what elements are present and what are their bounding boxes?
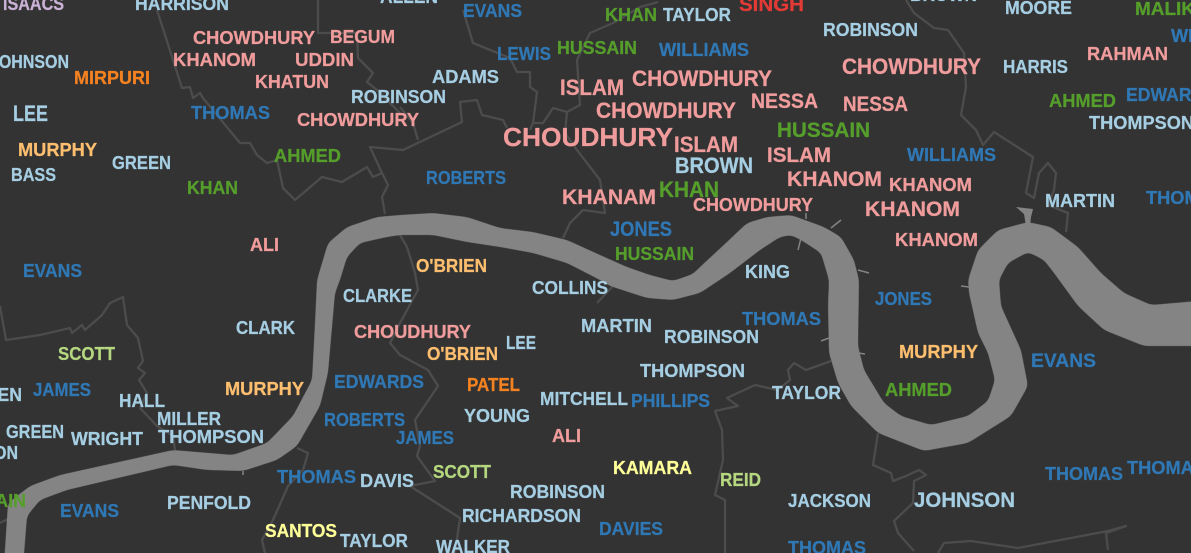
name: TAYLOR: TAYLOR	[663, 5, 731, 25]
name: PHILLIPS: PHILLIPS	[631, 391, 710, 411]
name: JAMES: JAMES	[33, 380, 91, 400]
name: BROWN: BROWN	[675, 153, 753, 178]
name: KHATUN: KHATUN	[255, 72, 329, 92]
name: MITCHELL: MITCHELL	[540, 389, 628, 409]
name: EVANS: EVANS	[463, 1, 522, 21]
name: KHANOM: KHANOM	[787, 168, 882, 191]
name: KHAN: KHAN	[605, 5, 657, 25]
name: EVANS: EVANS	[23, 261, 82, 281]
name: NESSA: NESSA	[751, 90, 818, 113]
name: EDWARDS: EDWARDS	[334, 372, 424, 392]
name: KING: KING	[745, 262, 790, 282]
name: THOMAS: THOMAS	[1045, 464, 1123, 484]
name: SANTOS: SANTOS	[265, 521, 337, 541]
name: THOMPSON: THOMPSON	[1089, 113, 1191, 133]
name: JACKSON: JACKSON	[788, 491, 871, 511]
name: THOMAS: THOMAS	[191, 103, 270, 123]
name: TAYLOR: TAYLOR	[340, 531, 408, 551]
name: ROBINSON: ROBINSON	[510, 482, 605, 502]
name: CHOWDHURY: CHOWDHURY	[693, 195, 813, 215]
name: MURPHY: MURPHY	[899, 342, 978, 362]
name: CHOWDHURY: CHOWDHURY	[297, 110, 419, 130]
name: THOMPSON: THOMPSON	[158, 427, 264, 447]
name: THOMPSON: THOMPSON	[640, 361, 745, 381]
name: GREEN: GREEN	[6, 422, 64, 442]
name: PATEL: PATEL	[467, 375, 520, 395]
name: CHOUDHURY: CHOUDHURY	[503, 122, 673, 152]
name: MARTIN: MARTIN	[1045, 191, 1115, 211]
name: ROBINSON: ROBINSON	[351, 87, 446, 107]
name: ROBERTS: ROBERTS	[324, 410, 405, 430]
name: CHOWDHURY: CHOWDHURY	[842, 54, 981, 79]
name: RAHMAN: RAHMAN	[1087, 44, 1168, 64]
name: MIRPURI: MIRPURI	[74, 68, 150, 88]
name: HUSSAIN: HUSSAIN	[777, 119, 870, 142]
name: KHANOM: KHANOM	[889, 175, 972, 195]
name: BASS: BASS	[11, 165, 56, 185]
name: YOUNG: YOUNG	[464, 406, 530, 426]
name: ROBINSON: ROBINSON	[823, 20, 918, 40]
name: UDDIN: UDDIN	[295, 50, 354, 70]
name: KHAN: KHAN	[659, 177, 719, 202]
name: CHOWDHURY: CHOWDHURY	[193, 28, 315, 48]
name: SCOTT: SCOTT	[433, 462, 491, 482]
name: DAVIES: DAVIES	[599, 519, 663, 539]
name: ROBERTS: ROBERTS	[426, 168, 506, 188]
name: HUSSAIN: HUSSAIN	[615, 244, 694, 264]
name: ISLAM: ISLAM	[767, 144, 831, 167]
name: GREEN: GREEN	[112, 153, 171, 173]
name: WRIGHT: WRIGHT	[71, 429, 143, 449]
name: JOHNSON: JOHNSON	[914, 488, 1015, 512]
name: BEGUM: BEGUM	[330, 27, 395, 47]
name: LEWIS: LEWIS	[497, 44, 551, 64]
river Thames	[3, 213, 1191, 553]
name: ROBINSON: ROBINSON	[664, 327, 759, 347]
name: PENFOLD: PENFOLD	[167, 493, 251, 513]
name: KHANAM: KHANAM	[562, 186, 656, 209]
name: MARTIN: MARTIN	[581, 316, 652, 336]
name: MURPHY: MURPHY	[225, 379, 304, 399]
name: CLARK: CLARK	[236, 318, 295, 338]
name: LEE: LEE	[506, 333, 536, 353]
name: TAYLOR: TAYLOR	[772, 383, 841, 403]
name: WILLIAMS: WILLIAMS	[907, 145, 996, 165]
name: LEE: LEE	[13, 101, 48, 126]
name: KHAN: KHAN	[187, 178, 238, 198]
name: WILLIAMS: WILLIAMS	[659, 40, 749, 60]
name: AHMED: AHMED	[885, 380, 952, 400]
name: JAMES: JAMES	[396, 428, 454, 448]
name: ISLAM: ISLAM	[674, 132, 738, 157]
name: CHOWDHURY: CHOWDHURY	[596, 98, 736, 123]
name: KAMARA: KAMARA	[613, 458, 692, 478]
name: NESSA: NESSA	[843, 93, 908, 116]
name: HUSSAIN: HUSSAIN	[557, 38, 637, 58]
name: MILLER: MILLER	[157, 409, 221, 429]
name: THOMAS: THOMAS	[277, 467, 356, 487]
name: CLARKE: CLARKE	[343, 286, 412, 306]
name: O'BRIEN: O'BRIEN	[416, 256, 487, 276]
name: KHANOM: KHANOM	[865, 198, 960, 221]
name: COLLINS: COLLINS	[532, 278, 608, 298]
name: THOMAS: THOMAS	[742, 309, 821, 329]
name: EVANS: EVANS	[1031, 350, 1096, 372]
name: SCOTT: SCOTT	[58, 344, 115, 364]
name: JONES: JONES	[610, 218, 672, 241]
name: CHOWDHURY: CHOWDHURY	[632, 66, 772, 91]
name: KHANOM: KHANOM	[895, 230, 978, 250]
name: HARRIS: HARRIS	[1003, 57, 1068, 77]
name: HALL: HALL	[119, 391, 165, 411]
name: MURPHY: MURPHY	[18, 140, 97, 160]
name: O'BRIEN: O'BRIEN	[427, 344, 498, 364]
name: KHANOM: KHANOM	[173, 50, 256, 70]
name: REID: REID	[720, 470, 761, 490]
name: RICHARDSON: RICHARDSON	[462, 506, 581, 526]
name: ALI: ALI	[552, 426, 581, 446]
name: ALI: ALI	[250, 235, 279, 255]
name: AHMED: AHMED	[1049, 91, 1116, 111]
name: JONES: JONES	[875, 289, 932, 309]
name: CHOUDHURY: CHOUDHURY	[354, 322, 471, 342]
name: ISLAM: ISLAM	[560, 75, 624, 100]
name: EVANS: EVANS	[60, 501, 119, 521]
name: AHMED: AHMED	[274, 146, 341, 166]
name: ADAMS: ADAMS	[432, 67, 499, 87]
name: DAVIS: DAVIS	[360, 471, 414, 491]
